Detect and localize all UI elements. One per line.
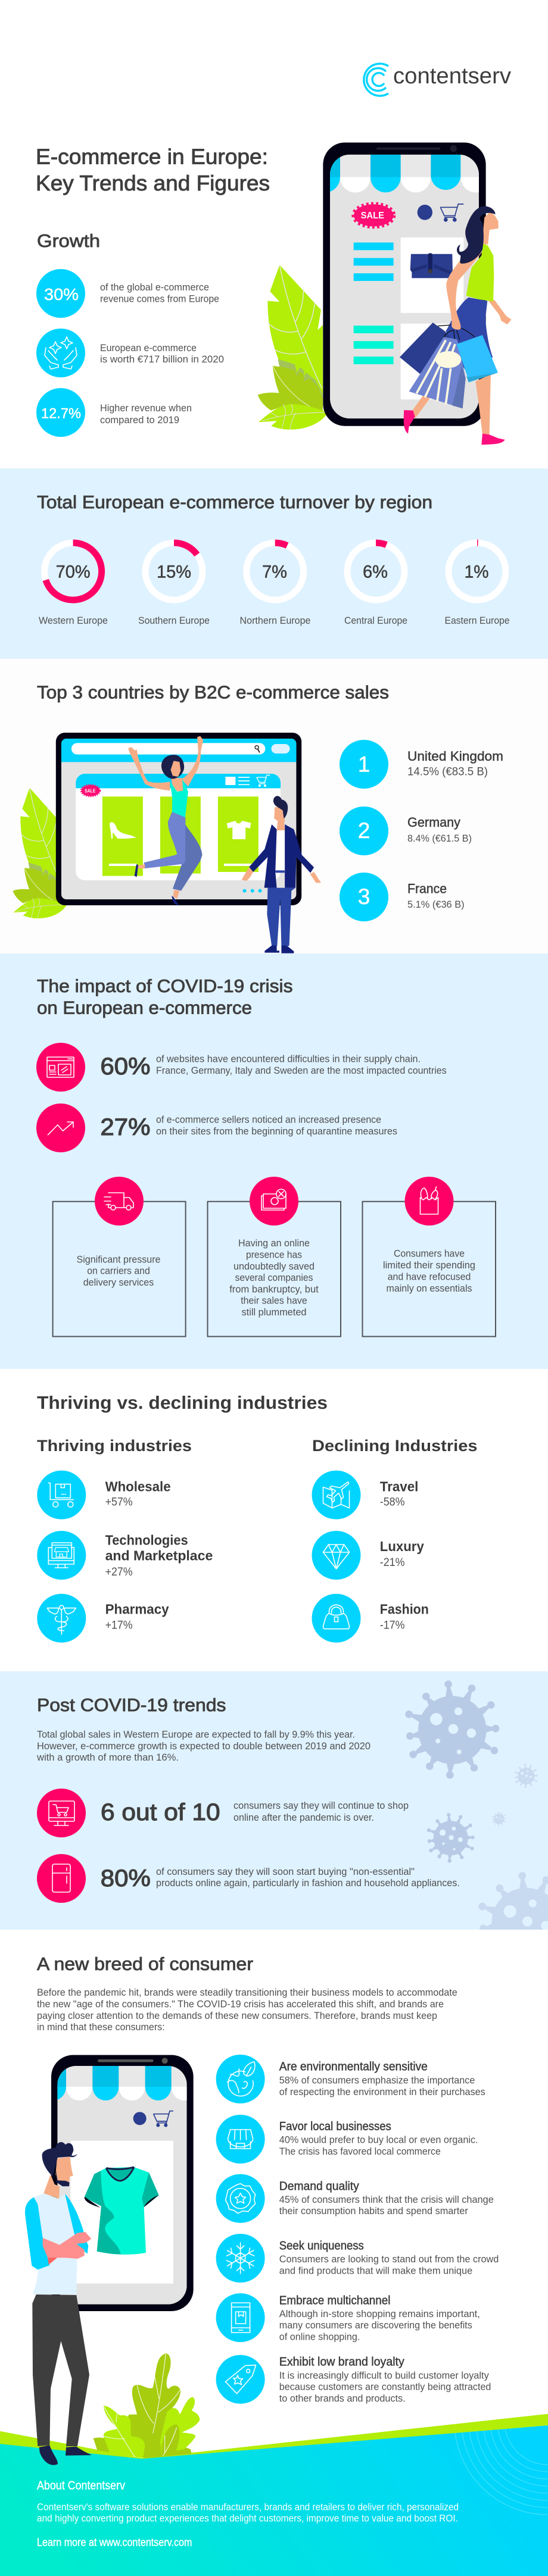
stat: 80%: 80% (101, 1865, 151, 1892)
stat: 80%: of consumers say they will soon start buying "non-essential" (156, 1866, 415, 1877)
trait: low brand loyalty (216, 2355, 491, 2404)
rank: France: 5.1% (€36 B) (407, 899, 465, 910)
stat: 27% (36, 1103, 397, 1152)
list bars (354, 242, 394, 364)
man with blazer (241, 796, 321, 954)
SALE badge (354, 204, 394, 226)
industry: luxury (312, 1531, 424, 1580)
leaves behind phone (258, 265, 328, 430)
heading: post covid trends: Post COVID-19 trends (37, 1695, 226, 1715)
stat: 12.7%: compared to 2019 (100, 414, 179, 426)
text block: consumer intro: the new "age of the consumers." The COVID-19 crisis has accelerated this shift, and brands are (37, 1998, 444, 2009)
text block: consumer intro: paying closer attention to the demands of these new consumers. Therefore, brands must keep (37, 2010, 437, 2021)
jumping woman (128, 736, 203, 906)
title (36, 144, 270, 195)
trait: favor local: Favor local businesses (279, 2120, 391, 2133)
text block: post covid intro (36, 1729, 370, 1763)
rank: France (340, 873, 465, 921)
stat: 717 billion: European e-commerce (100, 342, 197, 354)
text block: post covid intro: Total global sales in Western Europe are expected to fall by 9.9% this year. (37, 1729, 355, 1740)
trait: embrace multichannel: of online shopping. (279, 2331, 360, 2343)
stat: 6 out of 10: 6 out of 10 (101, 1799, 220, 1825)
product panel with t-shirt (70, 2141, 173, 2284)
section backgrounds (0, 468, 548, 1930)
heading: covid impact (37, 976, 293, 1018)
donut chart: Northern Europe: 7% (262, 562, 287, 582)
rank: France: France (407, 881, 447, 896)
icon: fridge (52, 1864, 70, 1892)
donut chart: Central Europe (344, 543, 407, 626)
logo: contentserv: contentserv (393, 64, 511, 89)
card: online presence: Having an online (238, 1237, 310, 1249)
store panel (76, 774, 281, 893)
gradient panel (0, 2425, 548, 2576)
card: limited spending: limited their spending (383, 1259, 475, 1271)
card: carriers pressure (53, 1177, 186, 1337)
heading: covid impact: The impact of COVID-19 crisis (37, 976, 293, 996)
icon: hand truck (48, 1483, 73, 1507)
trait: embrace multichannel: Embrace multichannel (279, 2294, 390, 2307)
title: Key Trends and Figures (36, 171, 270, 195)
card: online presence: their sales have (241, 1295, 307, 1306)
donut chart: Northern Europe: Northern Europe (239, 615, 311, 626)
trait: low brand loyalty: to other brands and products. (279, 2393, 406, 2404)
industry: pharmacy (37, 1594, 169, 1643)
SALE badge small: SALE (85, 788, 96, 793)
text block: post covid intro: with a growth of more than 16%. (36, 1752, 179, 1763)
stat: 30%: of the global e-commerce (100, 282, 209, 293)
stat: 27%: of e-commerce sellers noticed an increased presence (156, 1114, 381, 1126)
stat: 30% (36, 269, 219, 318)
stat: 27%: on their sites from the beginning of quarantine measures (156, 1126, 397, 1137)
trait: environmentally sensitive: of respecting the environment in their purchases (279, 2086, 485, 2097)
logo: contentserv (364, 64, 511, 96)
icon: quality badge (226, 2184, 256, 2214)
industry: pharmacy: Pharmacy (105, 1602, 169, 1617)
man head and torso (25, 2142, 91, 2286)
icon: handbag (323, 1605, 349, 1629)
stat: 6 out of 10 (37, 1789, 409, 1837)
text block: about contentserv: and highly converting product experiences that delight customers, improve time to value and boost ROI. (37, 2512, 458, 2524)
phone body (323, 142, 486, 426)
card: online presence: several companies (235, 1272, 313, 1283)
donut chart: Southern Europe: 15% (157, 562, 191, 582)
concentric arcs (455, 2428, 548, 2515)
trait: environmentally sensitive: 58% of consumers emphasize the importance (279, 2074, 475, 2086)
trait: demand quality: their consumption habits and spend smarter (279, 2205, 468, 2217)
industry: luxury: -21% (380, 1556, 405, 1569)
footer band (0, 2414, 548, 2576)
stat: 12.7%: Higher revenue when (100, 402, 192, 414)
card: carriers pressure: delivery services (83, 1277, 154, 1288)
stat: 30%: 30% (44, 285, 79, 304)
product panels (401, 237, 463, 399)
donut chart: Central Europe: Central Europe (344, 615, 407, 626)
icon: storefront (228, 2130, 253, 2149)
stat: 12.7% (36, 388, 192, 437)
stat: 60%: 60% (100, 1053, 150, 1080)
text block: consumer intro: in mind that these consumers: (37, 2021, 165, 2033)
trait: demand quality (216, 2174, 494, 2223)
heading: thriving industries: Thriving industries (37, 1437, 192, 1455)
trait: seek uniqueness: Consumers are looking to stand out from the crowd (279, 2253, 499, 2265)
trait: low brand loyalty: because customers are constantly being attracted (279, 2381, 491, 2392)
card: limited spending: Consumers have (394, 1248, 465, 1259)
donut chart: Central Europe: 6% (363, 562, 388, 582)
industry: fashion (312, 1594, 429, 1643)
trait: low brand loyalty: Exhibit low brand loyalty (279, 2356, 404, 2369)
donut chart: Western Europe: Western Europe (39, 615, 108, 626)
industry: fashion: -17% (380, 1619, 405, 1632)
rank: United Kingdom (340, 740, 503, 789)
text block: about contentserv: Contentserv's software solutions enable manufacturers, brands and retailers to deliver rich, personalized (37, 2502, 459, 2513)
trait: seek uniqueness (216, 2234, 499, 2283)
icon: hands with stars (45, 337, 77, 369)
shopper woman (400, 206, 512, 445)
illustration: phone shop with shopper (258, 142, 512, 445)
rank: United Kingdom: 14.5% (€83.5 B) (407, 765, 488, 779)
rank: Germany (340, 806, 472, 855)
icon: price tag with star (226, 2365, 256, 2394)
trait: seek uniqueness: and find products that will make them unique (279, 2265, 472, 2276)
industry: travel: -58% (380, 1495, 405, 1508)
heading: declining industries: Declining Industries (312, 1437, 478, 1455)
donut chart: Eastern Europe: Eastern Europe (444, 615, 510, 626)
icon: browser window (47, 1057, 74, 1077)
trait: demand quality: 45% of consumers think that the crisis will change (279, 2194, 494, 2205)
rank: Germany: 2 (358, 818, 370, 843)
stat: 717 billion: is worth €717 billion in 2020 (100, 354, 224, 365)
phone screen (57, 2066, 187, 2305)
text block: about contentserv: Learn more at www.contentserv.com (37, 2536, 192, 2548)
icon: snowflake (227, 2243, 254, 2274)
trait: embrace multichannel: Although in-store shopping remains important, (279, 2308, 480, 2319)
industry: wholesale: Wholesale (105, 1478, 171, 1494)
icon: rising chart arrow (48, 1122, 73, 1135)
heading: thriving vs declining: Thriving vs. declining industries (37, 1392, 328, 1413)
text block: consumer intro: Before the pandemic hit, brands were steadily transitioning their business models to accommodate (37, 1987, 457, 1998)
tablet body (56, 733, 301, 905)
text block: post covid intro: However, e-commerce growth is expected to double between 2019 and 2020 (37, 1740, 370, 1752)
icon: delivery truck (104, 1193, 133, 1210)
donut chart: Western Europe: 70% (56, 562, 91, 582)
rank: Germany: 8.4% (€61.5 B) (407, 833, 472, 844)
heading: turnover by region: Total European e-commerce turnover by region (37, 492, 432, 512)
cart and account icons (133, 2111, 173, 2127)
stat: 60% (36, 1043, 447, 1092)
text block: about contentserv: About Contentserv (37, 2479, 126, 2493)
cart and account icons (418, 204, 463, 222)
stat: 27%: 27% (100, 1114, 150, 1140)
donut chart: Western Europe (39, 543, 108, 626)
card: limited spending: mainly on essentials (386, 1283, 472, 1294)
stat: 80%: products online again, particularly in fashion and household appliances. (156, 1877, 460, 1889)
card: online presence: from bankruptcy, but (229, 1283, 319, 1295)
donut chart: Eastern Europe: 1% (465, 562, 488, 582)
industry: pharmacy: +17% (105, 1619, 133, 1632)
industry: technologies and marketplace: Technologies (105, 1532, 188, 1548)
text block: about contentserv (37, 2479, 459, 2548)
consumer traits list (216, 2055, 499, 2404)
card: online presence: still plummeted (242, 1306, 306, 1318)
donut chart: Southern Europe (138, 543, 210, 626)
card: limited spending: and have refocused (388, 1271, 471, 1282)
icon: banknotes with cross (261, 1189, 286, 1210)
icon: smartphone (232, 2303, 250, 2333)
icon: grocery bag (421, 1187, 438, 1214)
heading: top 3 countries: Top 3 countries by B2C e-commerce sales (37, 682, 389, 702)
industry: luxury: Luxury (380, 1539, 424, 1554)
card: limited spending (362, 1177, 496, 1337)
card: carriers pressure: on carriers and (87, 1265, 150, 1277)
industry: wholesale: +57% (105, 1495, 133, 1508)
heading: growth: Growth (37, 230, 100, 251)
donut chart: Eastern Europe (444, 543, 510, 626)
trait: demand quality: Demand quality (279, 2180, 359, 2193)
icon: diamond (323, 1545, 349, 1569)
stat: 60%: of websites have encountered difficulties in their supply chain. (156, 1053, 421, 1064)
card: online presence: presence has (246, 1249, 302, 1260)
trait: low brand loyalty: It is increasingly difficult to build customer loyalty (279, 2369, 489, 2381)
stat: 12.7%: 12.7% (41, 406, 81, 421)
stat: 6 out of 10: online after the pandemic is over. (233, 1812, 374, 1823)
icon: monitor with cart (49, 1801, 74, 1825)
rank: France: 3 (358, 884, 370, 909)
industry: fashion: Fashion (380, 1602, 429, 1617)
trait: favor local (216, 2115, 478, 2164)
stat: 60%: France, Germany, Italy and Sweden are the most impacted countries (156, 1065, 447, 1076)
rank: United Kingdom: United Kingdom (407, 749, 503, 764)
leaves behind tablet (13, 788, 67, 918)
title: E-commerce in Europe: (36, 144, 268, 169)
illustration: man legs and plant (32, 2286, 200, 2465)
industry: travel (312, 1471, 418, 1520)
card: carriers pressure: Significant pressure (76, 1253, 161, 1265)
trait: environmentally sensitive (216, 2055, 485, 2103)
donut chart: Southern Europe: Southern Europe (138, 615, 210, 626)
phone screen (330, 155, 479, 419)
industry: technologies and marketplace: and Marketplace (105, 1548, 213, 1563)
industry: technologies and marketplace: +27% (105, 1565, 133, 1578)
stat: 717 billion (36, 329, 224, 377)
heading: new breed of consumer: A new breed of consumer (37, 1953, 253, 1974)
SALE badge: SALE (361, 211, 384, 221)
rank: United Kingdom: 1 (358, 752, 370, 776)
donut chart: Northern Europe (239, 543, 311, 626)
trait: seek uniqueness: Seek uniqueness (279, 2240, 364, 2253)
industry: technologies and marketplace (37, 1531, 213, 1580)
trait: embrace multichannel: many consumers are discovering the benefits (279, 2319, 472, 2331)
trait: favor local: 40% would prefer to buy local or even organic. (279, 2134, 478, 2145)
illustration: phone with t-shirt (25, 2055, 198, 2311)
industry: wholesale (37, 1471, 171, 1520)
lime wedge (0, 2414, 548, 2459)
industry: travel: Travel (380, 1478, 418, 1494)
text block: consumer intro (37, 1987, 457, 2033)
stat: 80% (37, 1854, 460, 1903)
icon: globe with leaf (228, 2062, 255, 2096)
stat: 30%: revenue comes from Europe (100, 293, 219, 305)
card: online presence: undoubtedly saved (233, 1261, 315, 1272)
stat: 6 out of 10: consumers say they will continue to shop (233, 1800, 409, 1811)
icon: map and plane (323, 1482, 349, 1508)
SALE badge small (81, 785, 100, 796)
man legs (32, 2286, 92, 2465)
icon: caduceus (47, 1605, 76, 1634)
illustration: tablet shop with people (13, 733, 321, 954)
heading: covid impact: on European e-commerce (37, 998, 252, 1018)
card: online presence (207, 1177, 341, 1337)
plant (94, 2353, 200, 2458)
decorative viruses (405, 1680, 548, 1930)
rank: Germany: Germany (407, 815, 460, 830)
trait: favor local: The crisis has favored local commerce (279, 2146, 441, 2157)
phone body (51, 2055, 194, 2311)
tablet screen (61, 739, 296, 899)
trait: embrace multichannel (216, 2293, 480, 2343)
icon: online store monitor (48, 1543, 74, 1568)
trait: environmentally sensitive: Are environmentally sensitive (279, 2061, 428, 2074)
